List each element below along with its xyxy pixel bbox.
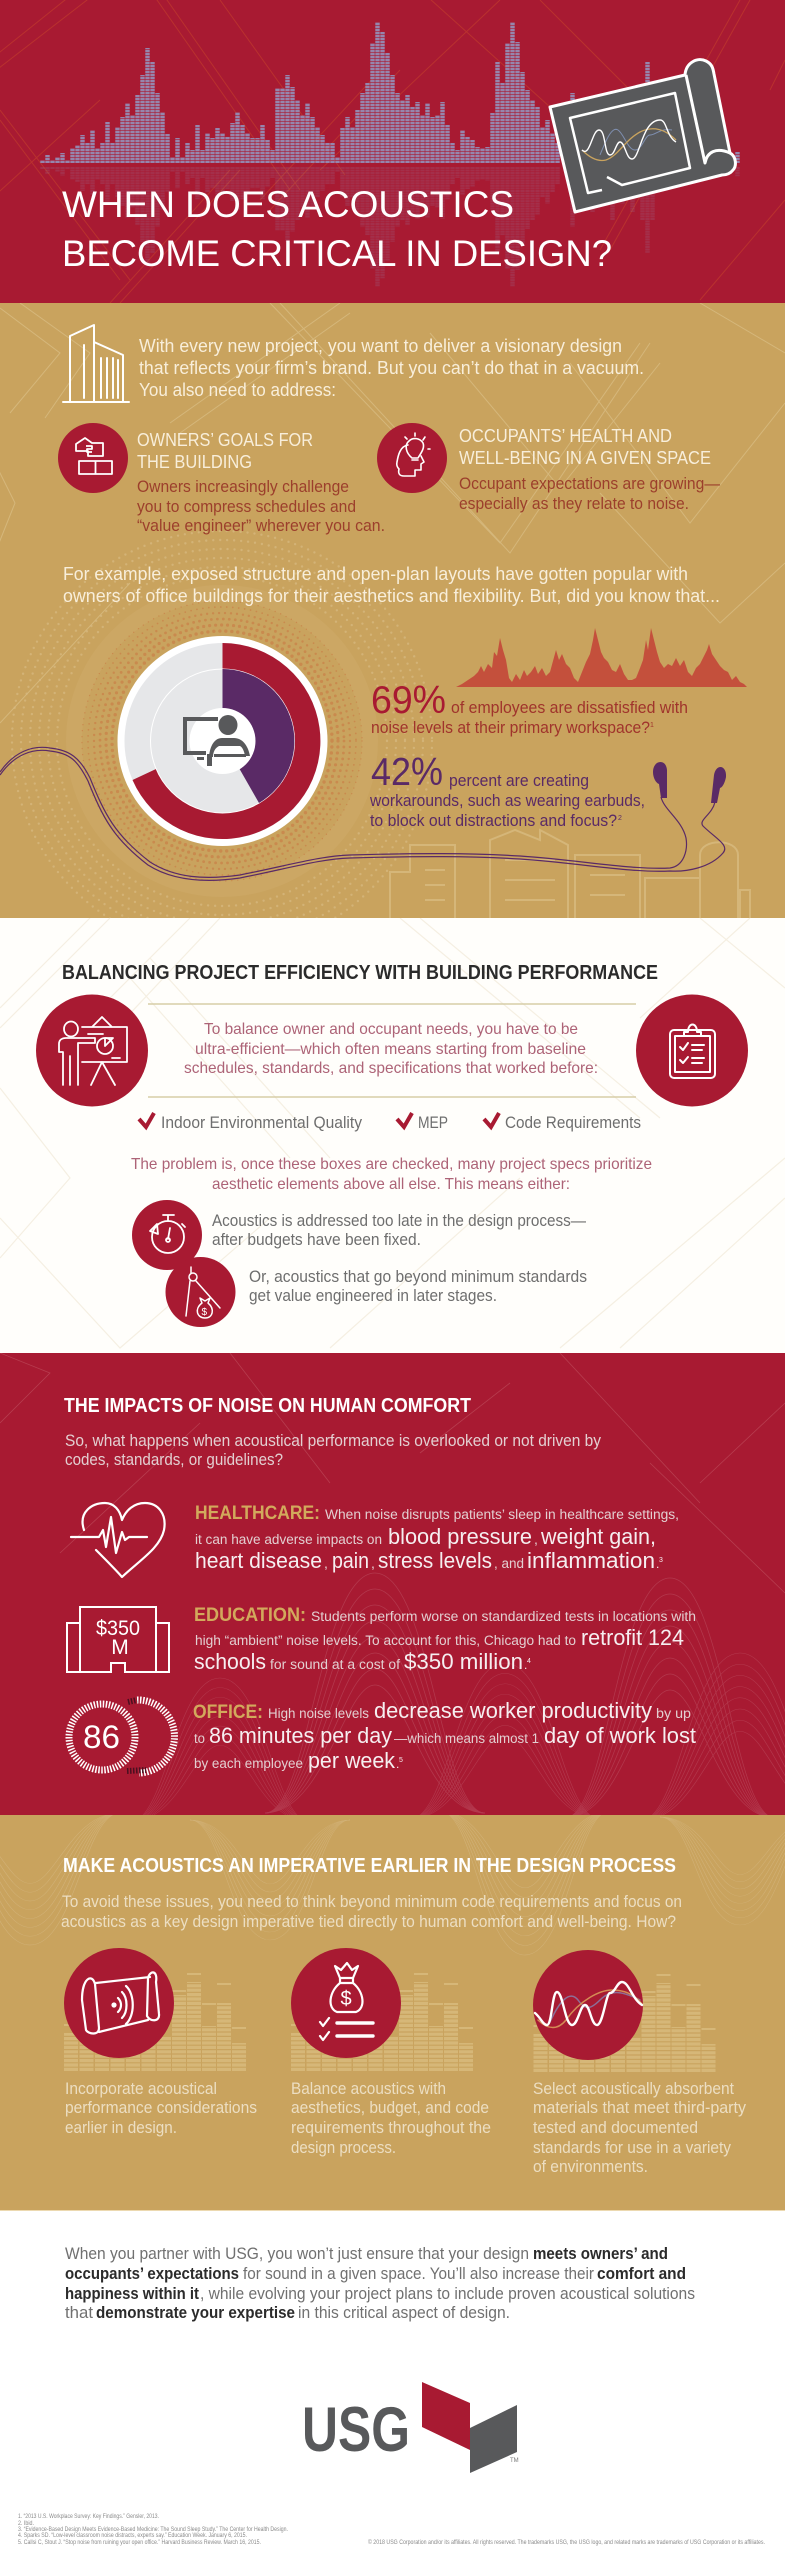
healthcare text: , [534, 1531, 538, 1547]
owners' goals text: you to compress schedules and [137, 497, 356, 516]
step 2 text [291, 2079, 491, 2157]
occupants' health text [459, 426, 720, 513]
footnotes: 4. Sparks SD. “Low-level classroom noise distracts, experts say.” Education Week. January 6, 2015. [18, 2533, 247, 2539]
intro text: that reflects your firm’s brand. But you can’t do that in a vacuum. [139, 358, 644, 378]
occupants' health text: WELL-BEING IN A GIVEN SPACE [459, 448, 711, 468]
office text: by up [656, 1706, 691, 1721]
step 2 text: requirements throughout the [291, 2118, 491, 2137]
education text: $350 million [404, 1649, 523, 1674]
icon: blueprint scroll with sound waves [550, 60, 735, 212]
owners' goals text: OWNERS’ GOALS FOR [137, 430, 313, 450]
intro callout with two rules: schedules, standards, and specifications that worked before: [184, 1060, 598, 1077]
title [62, 184, 612, 274]
icon: school costing $350 M: $350 [96, 1617, 140, 1640]
mini equalizer [456, 628, 747, 687]
panel: closing and footer [0, 2210, 785, 2560]
owners' goals text [137, 430, 385, 535]
icon: presenter at board [36, 994, 148, 1106]
office text [193, 1698, 696, 1773]
checklist items: Indoor Environmental Quality [161, 1113, 362, 1132]
sound wave reflection [42, 167, 738, 287]
education text: Students perform worse on standardized tests in locations with [311, 1609, 696, 1624]
icon: owners' goals [58, 423, 128, 493]
office text: to [194, 1731, 205, 1746]
faint halftone rings [12, 531, 432, 951]
healthcare text: . [656, 1557, 659, 1571]
stat: 69%: 69% [371, 679, 446, 722]
education text: EDUCATION: [194, 1605, 306, 1626]
healthcare text: it can have adverse impacts on [195, 1532, 382, 1547]
step 3 text: of environments. [533, 2157, 648, 2176]
healthcare text: HEALTHCARE: [195, 1503, 320, 1524]
stat: 69%: noise levels at their primary workspace? [371, 718, 650, 737]
checklist items [139, 1113, 641, 1132]
problem text: aesthetic elements above all else. This means either: [212, 1176, 570, 1193]
closing paragraph: happiness within it [65, 2284, 199, 2303]
healthcare text: , [324, 1555, 328, 1571]
stat: 42%: to block out distractions and focus? [370, 811, 617, 830]
either option one: Acoustics is addressed too late in the design process— [212, 1211, 586, 1230]
either option two [249, 1267, 587, 1305]
stat: 42%: workarounds, such as wearing earbuds, [369, 791, 645, 810]
footnotes: 5. Callsi C, Stout J. “Stop noise from ruining your open office.” Harvard Business Review. March 16, 2015. [18, 2540, 261, 2546]
step 3 [533, 1950, 708, 2072]
intro text: To avoid these issues, you need to think beyond minimum code requirements and focus on [62, 1892, 682, 1911]
owners' goals text: Owners increasingly challenge [137, 477, 349, 496]
icon: compass and money bag: $ [202, 1307, 208, 1318]
education text: high “ambient” noise levels. To account for this, Chicago had to [195, 1633, 576, 1648]
healthcare text: When noise disrupts patients’ sleep in healthcare settings, [325, 1507, 679, 1522]
title: BECOME CRITICAL IN DESIGN? [62, 233, 612, 274]
either option one: after budgets have been fixed. [212, 1230, 421, 1249]
closing paragraph: meets owners’ and [533, 2244, 668, 2263]
office text: —which means almost 1 [394, 1731, 539, 1746]
closing paragraph: demonstrate your expertise [96, 2303, 295, 2322]
icon: school costing $350 M: M [111, 1636, 129, 1659]
healthcare text: inflammation [527, 1548, 655, 1573]
checklist items: MEP [418, 1113, 448, 1132]
USG logo: TM [510, 2458, 519, 2464]
intro callout with two rules [148, 1004, 636, 1097]
USG logo [302, 2382, 519, 2473]
either option two: get value engineered in later stages. [249, 1286, 497, 1305]
healthcare text: weight gain, [540, 1524, 656, 1549]
stat: 42%: 2 [618, 815, 622, 822]
intro text: acoustics as a key design imperative tied directly to human comfort and well-being. How? [61, 1912, 676, 1931]
step 2 text: design process. [291, 2138, 396, 2157]
step 1 text: performance considerations [65, 2098, 257, 2117]
icon: material sound waves [535, 1982, 642, 2028]
icon: person at computer [183, 715, 250, 766]
checklist items: Code Requirements [505, 1113, 641, 1132]
education text: for sound at a cost of [270, 1657, 400, 1672]
intro text: So, what happens when acoustical performance is overlooked or not driven by [65, 1431, 601, 1450]
heading: BALANCING PROJECT EFFICIENCY WITH BUILDING PERFORMANCE [62, 962, 658, 984]
intro text [139, 336, 644, 400]
footnotes: 1. “2013 U.S. Workplace Survey: Key Findings.” Gensler, 2013. [18, 2514, 159, 2520]
intro callout with two rules: ultra-efficient—which often means starting from baseline [195, 1041, 586, 1058]
office text: 5 [399, 1757, 403, 1764]
example text: owners of office buildings for their aesthetics and flexibility. But, did you know that... [63, 586, 720, 606]
example text: For example, exposed structure and open-plan layouts have gotten popular with [63, 564, 688, 584]
donut chart: 69% and 42% [118, 636, 328, 846]
panel: why acoustics matters [0, 303, 785, 951]
occupants' health text: OCCUPANTS’ HEALTH AND [459, 426, 672, 446]
panel: balancing project efficiency [0, 918, 785, 1353]
intro callout with two rules: To balance owner and occupant needs, you have to be [204, 1021, 578, 1038]
office text: . [396, 1757, 399, 1771]
step 2 [291, 1948, 466, 2071]
stat: 69% [371, 679, 688, 737]
intro text: With every new project, you want to deliver a visionary design [139, 336, 622, 356]
closing paragraph: for sound in a given space. You’ll also increase their [243, 2264, 594, 2283]
icon: heart with pulse [71, 1503, 165, 1577]
step 1 [64, 1948, 239, 2071]
office text: day of work lost [544, 1723, 696, 1748]
education text: schools [194, 1649, 266, 1674]
step 3 text: Select acoustically absorbent [533, 2079, 734, 2098]
office text: decrease worker productivity [374, 1698, 652, 1723]
office text: per week [308, 1748, 396, 1773]
intro text: codes, standards, or guidelines? [65, 1450, 283, 1469]
stat: 69%: 1 [650, 722, 654, 729]
step 1 text: earlier in design. [65, 2118, 177, 2137]
intro text [65, 1431, 601, 1469]
icon: stopwatch [132, 1200, 202, 1270]
title: WHEN DOES ACOUSTICS [62, 184, 514, 225]
closing paragraph: , while evolving your project plans to include proven acoustical solutions [200, 2284, 695, 2303]
icon: earbuds and cable [0, 747, 726, 880]
office text: by each employee [194, 1756, 303, 1771]
footnotes: 2. Ibid. [18, 2521, 34, 2527]
icon: blueprint with sound [82, 1972, 159, 2034]
panel: header [0, 0, 785, 303]
step 2 text: aesthetics, budget, and code [291, 2098, 489, 2117]
healthcare text: heart disease [195, 1548, 322, 1573]
example text [63, 564, 720, 606]
education text: 4 [527, 1658, 531, 1665]
USG logo: USG [302, 2395, 410, 2465]
step 1 text: Incorporate acoustical [65, 2079, 217, 2098]
owners' goals text: THE BUILDING [137, 452, 252, 472]
icon: compass and money bag [166, 1257, 236, 1327]
step 1 text [65, 2079, 257, 2137]
problem text [131, 1156, 652, 1193]
closing paragraph: When you partner with USG, you won’t just ensure that your design [65, 2244, 529, 2263]
icon: occupants' health [377, 423, 447, 493]
stat: 69%: of employees are dissatisfied with [451, 698, 688, 717]
stat: 42% [369, 751, 645, 830]
occupants' health text: Occupant expectations are growing— [459, 474, 720, 493]
intro text [61, 1892, 682, 1931]
occupants' health text: especially as they relate to noise. [459, 494, 689, 513]
education text: . [524, 1658, 527, 1672]
intro text: You also need to address: [139, 380, 336, 400]
icon: money bag and checklist [320, 1963, 373, 2040]
closing paragraph [65, 2244, 695, 2322]
either option one [212, 1211, 586, 1249]
education text: retrofit 124 [581, 1625, 684, 1650]
healthcare text: , and [494, 1556, 524, 1571]
healthcare text: , [371, 1555, 375, 1571]
either option two: Or, acoustics that go beyond minimum standards [249, 1267, 587, 1286]
healthcare text: 3 [659, 1557, 663, 1564]
icon: 86 minutes gauge [69, 1700, 174, 1773]
faint city skyline [390, 830, 750, 918]
closing paragraph: in this critical aspect of design. [298, 2303, 510, 2322]
heading: MAKE ACOUSTICS AN IMPERATIVE EARLIER IN THE DESIGN PROCESS [63, 1855, 676, 1877]
healthcare text: stress levels [378, 1548, 492, 1573]
panel: impacts of noise [0, 1353, 785, 1822]
closing paragraph: occupants’ expectations [65, 2264, 239, 2283]
footnotes [18, 2514, 288, 2546]
sound wave equalizer [42, 22, 738, 163]
closing paragraph: that [65, 2303, 93, 2322]
healthcare text [195, 1503, 679, 1573]
stat: 42%: 42% [371, 751, 443, 794]
icon: 86 minutes gauge: 86 [83, 1719, 120, 1755]
icon: buildings [63, 325, 129, 402]
panel: make acoustics an imperative [0, 1811, 785, 2210]
closing paragraph: comfort and [597, 2264, 686, 2283]
stat: 42%: percent are creating [449, 771, 589, 790]
problem text: The problem is, once these boxes are checked, many project specs prioritize [131, 1156, 652, 1173]
step 3 text [533, 2079, 746, 2176]
owners' goals text: “value engineer” wherever you can. [137, 516, 385, 535]
healthcare text: blood pressure [388, 1524, 532, 1549]
office text: 86 minutes per day [209, 1723, 392, 1748]
footnotes: 3. “Evidence-Based Design Meets Evidence-Based Medicine: The Sound Sleep Study.” The Center for Health Design. [18, 2527, 288, 2533]
step 2: $ [340, 1988, 352, 2010]
office text: High noise levels [268, 1706, 369, 1721]
office text: OFFICE: [193, 1702, 263, 1723]
step 3 text: tested and documented [533, 2118, 698, 2137]
step 3 text: standards for use in a variety [533, 2138, 731, 2157]
heading: THE IMPACTS OF NOISE ON HUMAN COMFORT [64, 1395, 471, 1417]
step 3 text: materials that meet third-party [533, 2098, 746, 2117]
icon: school costing $350 M [67, 1607, 169, 1672]
step 2 text: Balance acoustics with [291, 2079, 446, 2098]
healthcare text: pain [332, 1548, 369, 1573]
icon: clipboard checklist [636, 994, 748, 1106]
education text [194, 1605, 696, 1674]
